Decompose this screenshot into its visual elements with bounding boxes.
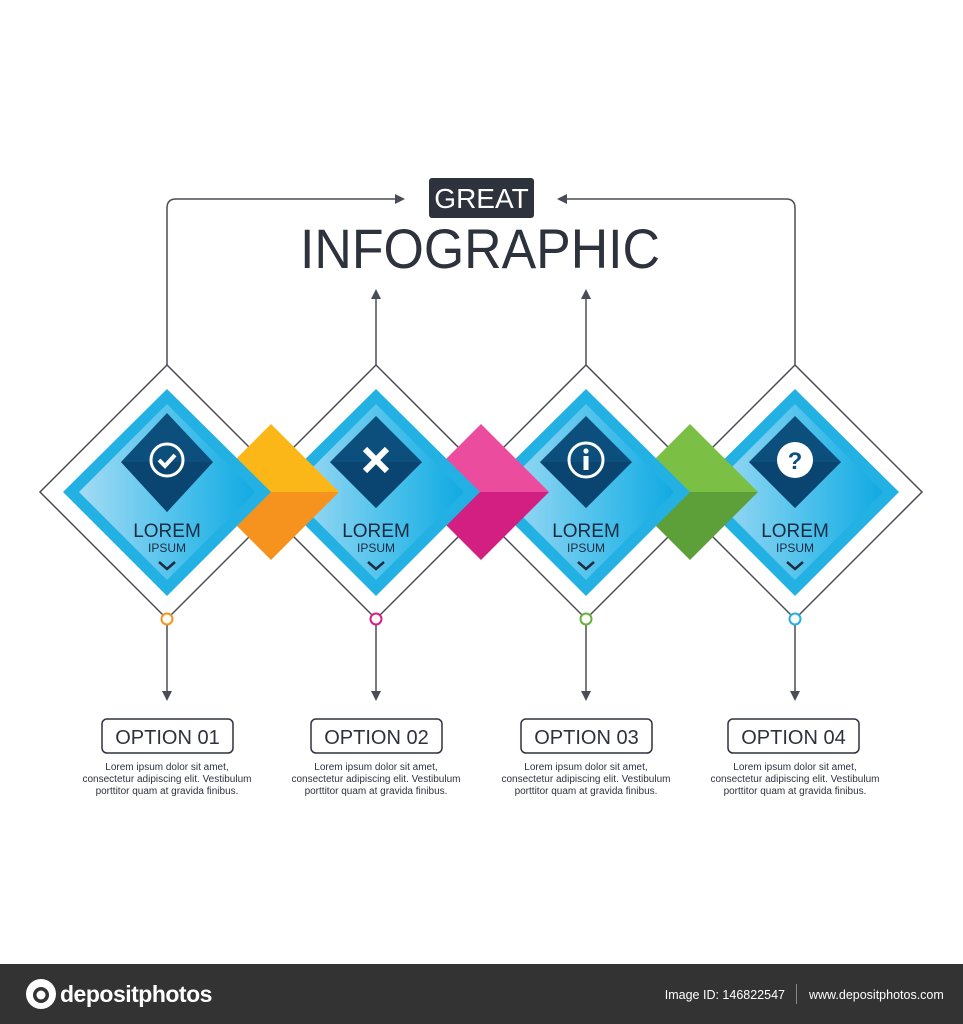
option 01: Lorem ipsum dolor sit amet, [105, 762, 229, 773]
step 2 diamond: LOREM [342, 521, 410, 542]
footer bar: Image ID: 146822547 [665, 988, 785, 1002]
connector: orange [203, 424, 339, 560]
footer bar: www.depositphotos.com [808, 988, 944, 1002]
icon: check [151, 444, 183, 476]
option 04: OPTION 04 [741, 727, 846, 749]
step 4 diamond: IPSUM [776, 541, 814, 555]
option 03 [502, 719, 670, 797]
option 03: OPTION 03 [534, 727, 639, 749]
outline diamonds [40, 365, 922, 619]
step 2 diamond [272, 389, 480, 596]
step 1 diamond: LOREM [133, 521, 201, 542]
step 3 diamond [482, 389, 690, 596]
step 3 diamond: IPSUM [567, 541, 605, 555]
step 2 diamond: IPSUM [357, 541, 395, 555]
option 02: porttitor quam at gravida finibus. [305, 786, 447, 797]
icon: info [569, 443, 603, 477]
title: INFOGRAPHIC: INFOGRAPHIC [300, 217, 660, 280]
option 01 [83, 719, 251, 797]
connector: pink [413, 424, 549, 560]
icon: cross [365, 449, 387, 471]
option 01: OPTION 01 [115, 727, 220, 749]
option 02: Lorem ipsum dolor sit amet, [314, 762, 438, 773]
connector: green [622, 424, 758, 560]
step 4 diamond [691, 389, 899, 596]
icon: camera logo [26, 979, 56, 1009]
option 02 [292, 719, 460, 797]
footer bar [0, 964, 963, 1024]
title badge: GREAT: GREAT [434, 183, 529, 214]
title badge: GREAT [429, 178, 534, 218]
step 1 diamond [63, 389, 271, 596]
option 02: consectetur adipiscing elit. Vestibulum [292, 774, 460, 785]
option 03: Lorem ipsum dolor sit amet, [524, 762, 648, 773]
option 01: porttitor quam at gravida finibus. [96, 786, 238, 797]
option 04 [711, 719, 879, 797]
footer bar: depositphotos [60, 981, 212, 1007]
icon: question [777, 442, 813, 478]
option 01: consectetur adipiscing elit. Vestibulum [83, 774, 251, 785]
option 04: Lorem ipsum dolor sit amet, [733, 762, 857, 773]
option 02: OPTION 02 [324, 727, 429, 749]
option 03: porttitor quam at gravida finibus. [515, 786, 657, 797]
step 1 diamond: IPSUM [148, 541, 186, 555]
option 04: consectetur adipiscing elit. Vestibulum [711, 774, 879, 785]
marker circles [162, 614, 800, 624]
step 3 diamond: LOREM [552, 521, 620, 542]
step 4 diamond: LOREM [761, 521, 829, 542]
option 04: porttitor quam at gravida finibus. [724, 786, 866, 797]
option 03: consectetur adipiscing elit. Vestibulum [502, 774, 670, 785]
connector lines [167, 199, 795, 699]
step 4 diamond: ? [788, 448, 802, 475]
